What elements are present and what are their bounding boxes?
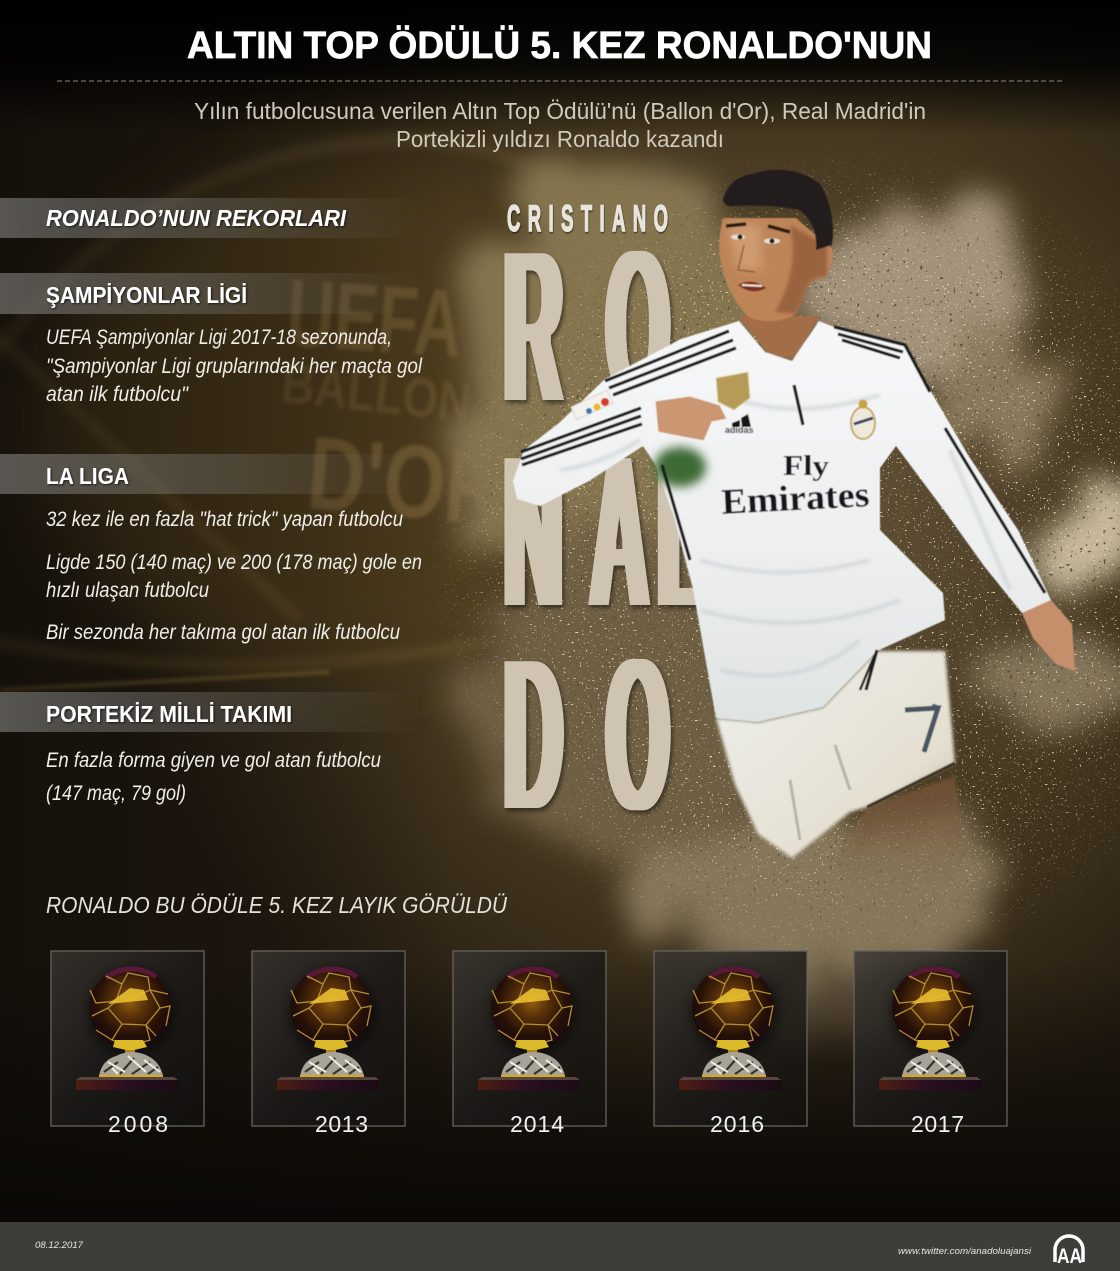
heading: Ronaldo'nun rekorları — [0, 198, 420, 238]
right hand — [1022, 600, 1075, 671]
panel: Portekiz Milli Takımı — [0, 692, 420, 805]
panel: La Liga — [0, 454, 422, 644]
leg — [835, 776, 966, 900]
panel: La Liga: LA LIGA — [46, 463, 129, 489]
shorts — [716, 651, 955, 858]
name: Cristiano: CRISTIANO — [507, 199, 668, 240]
background: golden ball trophy with Ballon d'Or lettering: D'OR — [303, 415, 507, 548]
subtitle: Portekizli yıldızı Ronaldo kazandı — [396, 126, 724, 152]
award card: 2008: 2008 — [108, 1111, 168, 1137]
award card: 2016 — [654, 951, 807, 1137]
award card: 2013 — [252, 951, 405, 1137]
neck — [739, 316, 819, 358]
award card: 2014 — [453, 951, 606, 1137]
heading: awards: RONALDO BU ÖDÜLE 5. KEZ LAYIK GÖRÜLDÜ — [46, 892, 507, 918]
head — [719, 170, 833, 321]
name: Ronaldo large letters — [504, 200, 707, 860]
award card: 2017: 2017 — [911, 1111, 964, 1137]
La Liga patch — [571, 390, 613, 420]
panel: Şampiyonlar Ligi: ŞAMPİYONLAR LİGİ — [46, 282, 247, 308]
logo: Anadolu Agency: AA — [1057, 1245, 1082, 1268]
name: Ronaldo large letters: RO — [504, 200, 669, 452]
background: golden ball trophy with Ballon d'Or lettering: BALLON — [279, 351, 474, 434]
sponsor: Fly — [783, 450, 830, 482]
background: dust clouds — [428, 142, 1120, 1050]
date: 08.12.2017 — [35, 1240, 84, 1251]
left hand — [655, 396, 727, 441]
panel: Şampiyonlar Ligi: "Şampiyonlar Ligi gruplarındaki her maçta gol — [46, 355, 423, 378]
player: Ronaldo — [513, 170, 1075, 900]
shadow under hand — [654, 447, 706, 487]
logo: Anadolu Agency — [1055, 1236, 1083, 1268]
panel: La Liga: Bir sezonda her takıma gol atan ilk futbolcu — [46, 621, 400, 644]
award card: 2013: 2013 — [315, 1111, 368, 1137]
subtitle: Yılın futbolcusuna verilen Altın Top Ödülü'nü (Ballon d'Or), Real Madrid'in — [194, 98, 926, 124]
panel: La Liga: 32 kez ile en fazla "hat trick" yapan futbolcu — [46, 508, 403, 531]
club crest — [851, 400, 875, 439]
panel: Şampiyonlar Ligi — [0, 273, 423, 406]
panel: Portekiz Milli Takımı: (147 maç, 79 gol) — [46, 782, 186, 805]
shirt folds — [560, 395, 1010, 676]
award card: 2014: 2014 — [510, 1111, 564, 1137]
twitter address: www.twitter.com/anadoluajansi — [898, 1246, 1032, 1257]
award card: 2016: 2016 — [710, 1111, 764, 1137]
award card: 2017 — [854, 951, 1007, 1137]
name: Ronaldo large letters: NAL — [504, 405, 707, 657]
panel: La Liga: hızlı ulaşan futbolcu — [46, 579, 209, 602]
heading: Ronaldo'nun rekorları: RONALDO’NUN REKORLARI — [46, 205, 347, 231]
footer — [0, 1222, 1120, 1271]
title: ALTIN TOP ÖDÜLÜ 5. KEZ RONALDO'NUN — [187, 24, 932, 67]
panel: Şampiyonlar Ligi: atan ilk futbolcu" — [46, 383, 189, 406]
background: golden ball trophy with Ballon d'Or lettering — [0, 140, 640, 690]
panel: La Liga: Ligde 150 (140 maç) ve 200 (178 maç) gole en — [46, 551, 422, 574]
adidas logo — [725, 414, 754, 435]
panel: Portekiz Milli Takımı: PORTEKİZ MİLLİ TAKIMI — [46, 701, 292, 727]
shirt — [513, 321, 1051, 722]
adidas logo: adidas — [725, 425, 754, 435]
sponsor: Emirates — [720, 474, 870, 522]
subtitle — [194, 98, 926, 152]
background: golden ball trophy with Ballon d'Or lettering: UEFA — [284, 259, 466, 378]
panel: Portekiz Milli Takımı: En fazla forma giyen ve gol atan futbolcu — [46, 749, 381, 772]
name: Ronaldo large letters: DO — [504, 608, 669, 860]
gold badge — [716, 372, 750, 410]
panel: Şampiyonlar Ligi: UEFA Şampiyonlar Ligi 2017-18 sezonunda, — [46, 326, 392, 349]
sleeve and shoulder stripes — [521, 327, 1045, 690]
award card: 2008 — [51, 951, 204, 1137]
sponsor — [720, 450, 870, 522]
